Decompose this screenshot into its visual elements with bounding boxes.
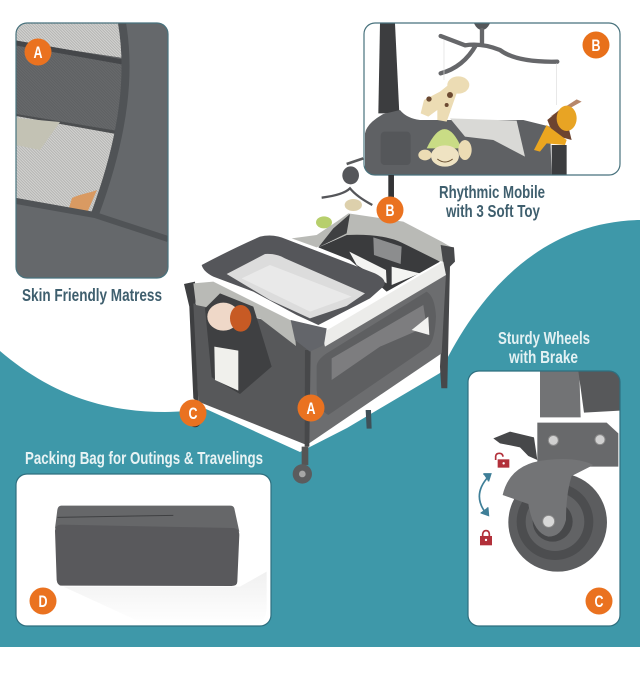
badge C on crib: C (188, 404, 198, 423)
toy turtle (418, 129, 472, 167)
badge C on crib (180, 400, 206, 426)
bag body (55, 525, 239, 586)
badge B on panel: B (592, 36, 600, 55)
panel B border (364, 23, 620, 175)
strings (444, 40, 557, 105)
badge A on panel: A (34, 43, 42, 62)
left floral rail (193, 282, 296, 346)
right pole (552, 145, 567, 175)
fabric (578, 371, 620, 413)
curved arrow (479, 474, 491, 515)
bag top (55, 506, 239, 532)
badge B on panel (582, 32, 610, 58)
mobile (316, 158, 382, 237)
wheel tyre (508, 473, 607, 572)
organizer toys (207, 303, 251, 332)
badge A on panel (24, 38, 52, 66)
caption: packing bag: Packing Bag for Outings & Travelings (25, 448, 263, 468)
badge B on crib: B (386, 201, 394, 220)
zipper line (57, 515, 173, 517)
open lock (496, 453, 509, 468)
brake pedal (493, 432, 537, 460)
crib base (365, 110, 552, 175)
caption: skin friendly mattress: Skin Friendly Matress (22, 285, 162, 305)
caption: sturdy wheels: with Brake (508, 347, 578, 367)
bag shadow (63, 572, 267, 625)
mobile hub (474, 23, 490, 30)
left corner post (184, 282, 198, 403)
caption: rhythmic mobile: Rhythmic Mobile (439, 182, 545, 202)
panel D: packing bag (16, 474, 271, 626)
main crib illustration (184, 158, 455, 484)
rivets (548, 435, 605, 445)
organizer diapers (214, 347, 238, 391)
toy lion (534, 99, 582, 152)
wheel inner ring (526, 492, 584, 551)
bracket (537, 423, 618, 467)
front left fabric face (193, 303, 308, 445)
teal background shape (0, 220, 640, 647)
badge A on crib (298, 394, 324, 422)
badge C on panel (586, 588, 612, 614)
fender (503, 459, 593, 537)
mobile arm (441, 30, 557, 73)
corner joint (291, 320, 327, 352)
corner post front (305, 350, 311, 447)
caption: sturdy wheels: Sturdy Wheels (498, 328, 590, 348)
front wheel (293, 447, 312, 484)
front right face (307, 274, 446, 445)
rear wheel (189, 416, 201, 427)
axle bolt (543, 515, 555, 527)
badge A on crib: A (306, 399, 316, 418)
panel A: skin friendly mattress (16, 23, 168, 278)
caption: sturdy wheels (498, 328, 590, 367)
badge C on panel: C (594, 592, 604, 611)
side pocket (381, 132, 411, 165)
panel A border (16, 23, 168, 278)
window gap (412, 317, 429, 335)
mesh window (317, 292, 436, 415)
caption: rhythmic mobile: with 3 Soft Toy (445, 201, 540, 221)
wheel hub ring (517, 483, 593, 560)
panel C: wheel with brake (468, 371, 620, 626)
hanging organizer (205, 293, 272, 394)
mattress through mesh (332, 305, 427, 380)
badge D on panel (30, 588, 56, 614)
back leg (366, 410, 372, 429)
floral rail (450, 118, 525, 157)
closed lock (480, 531, 492, 545)
post (540, 371, 581, 417)
toy giraffe (421, 76, 469, 122)
crib pole (378, 23, 399, 113)
changing table tray (202, 235, 385, 325)
caption: rhythmic mobile (439, 182, 545, 221)
badge D on panel: D (38, 592, 48, 611)
back rail and interior (292, 213, 453, 292)
bag illustration (55, 506, 267, 625)
wheel inner (532, 508, 573, 542)
badge B on crib (376, 196, 404, 224)
panel C border (468, 371, 620, 626)
mattress centre (242, 265, 352, 312)
panel B: rhythmic mobile (365, 24, 582, 174)
mobile pole (388, 175, 394, 200)
right floral rail (322, 262, 446, 347)
back right corner post (440, 245, 455, 388)
changing table mattress (227, 254, 365, 318)
